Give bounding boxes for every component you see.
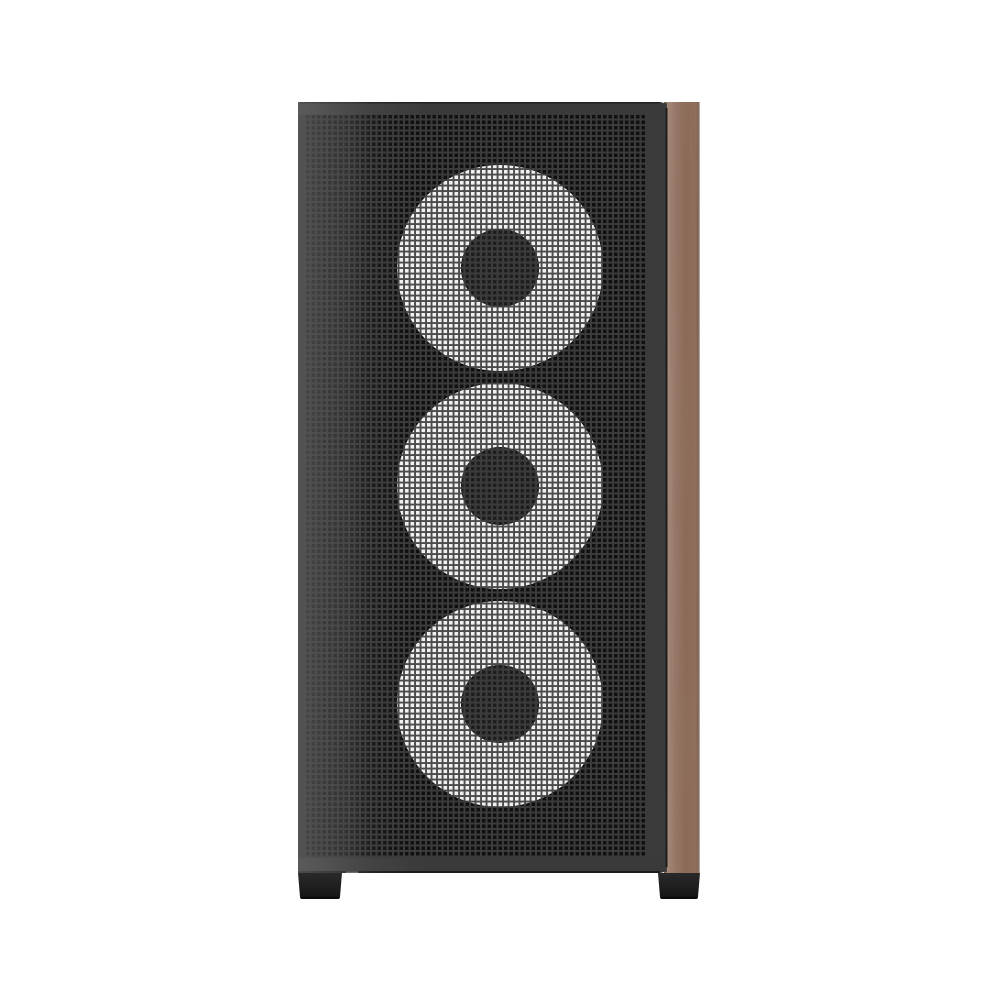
fan 3: [397, 601, 603, 807]
left edge highlight: [298, 102, 667, 873]
front panel: [298, 102, 668, 873]
fan 1: [397, 165, 603, 371]
left foot: [298, 873, 342, 899]
wood side panel: [664, 102, 700, 873]
mesh perforation: [305, 114, 645, 857]
right foot: [658, 873, 700, 899]
fan 2: [397, 383, 603, 589]
